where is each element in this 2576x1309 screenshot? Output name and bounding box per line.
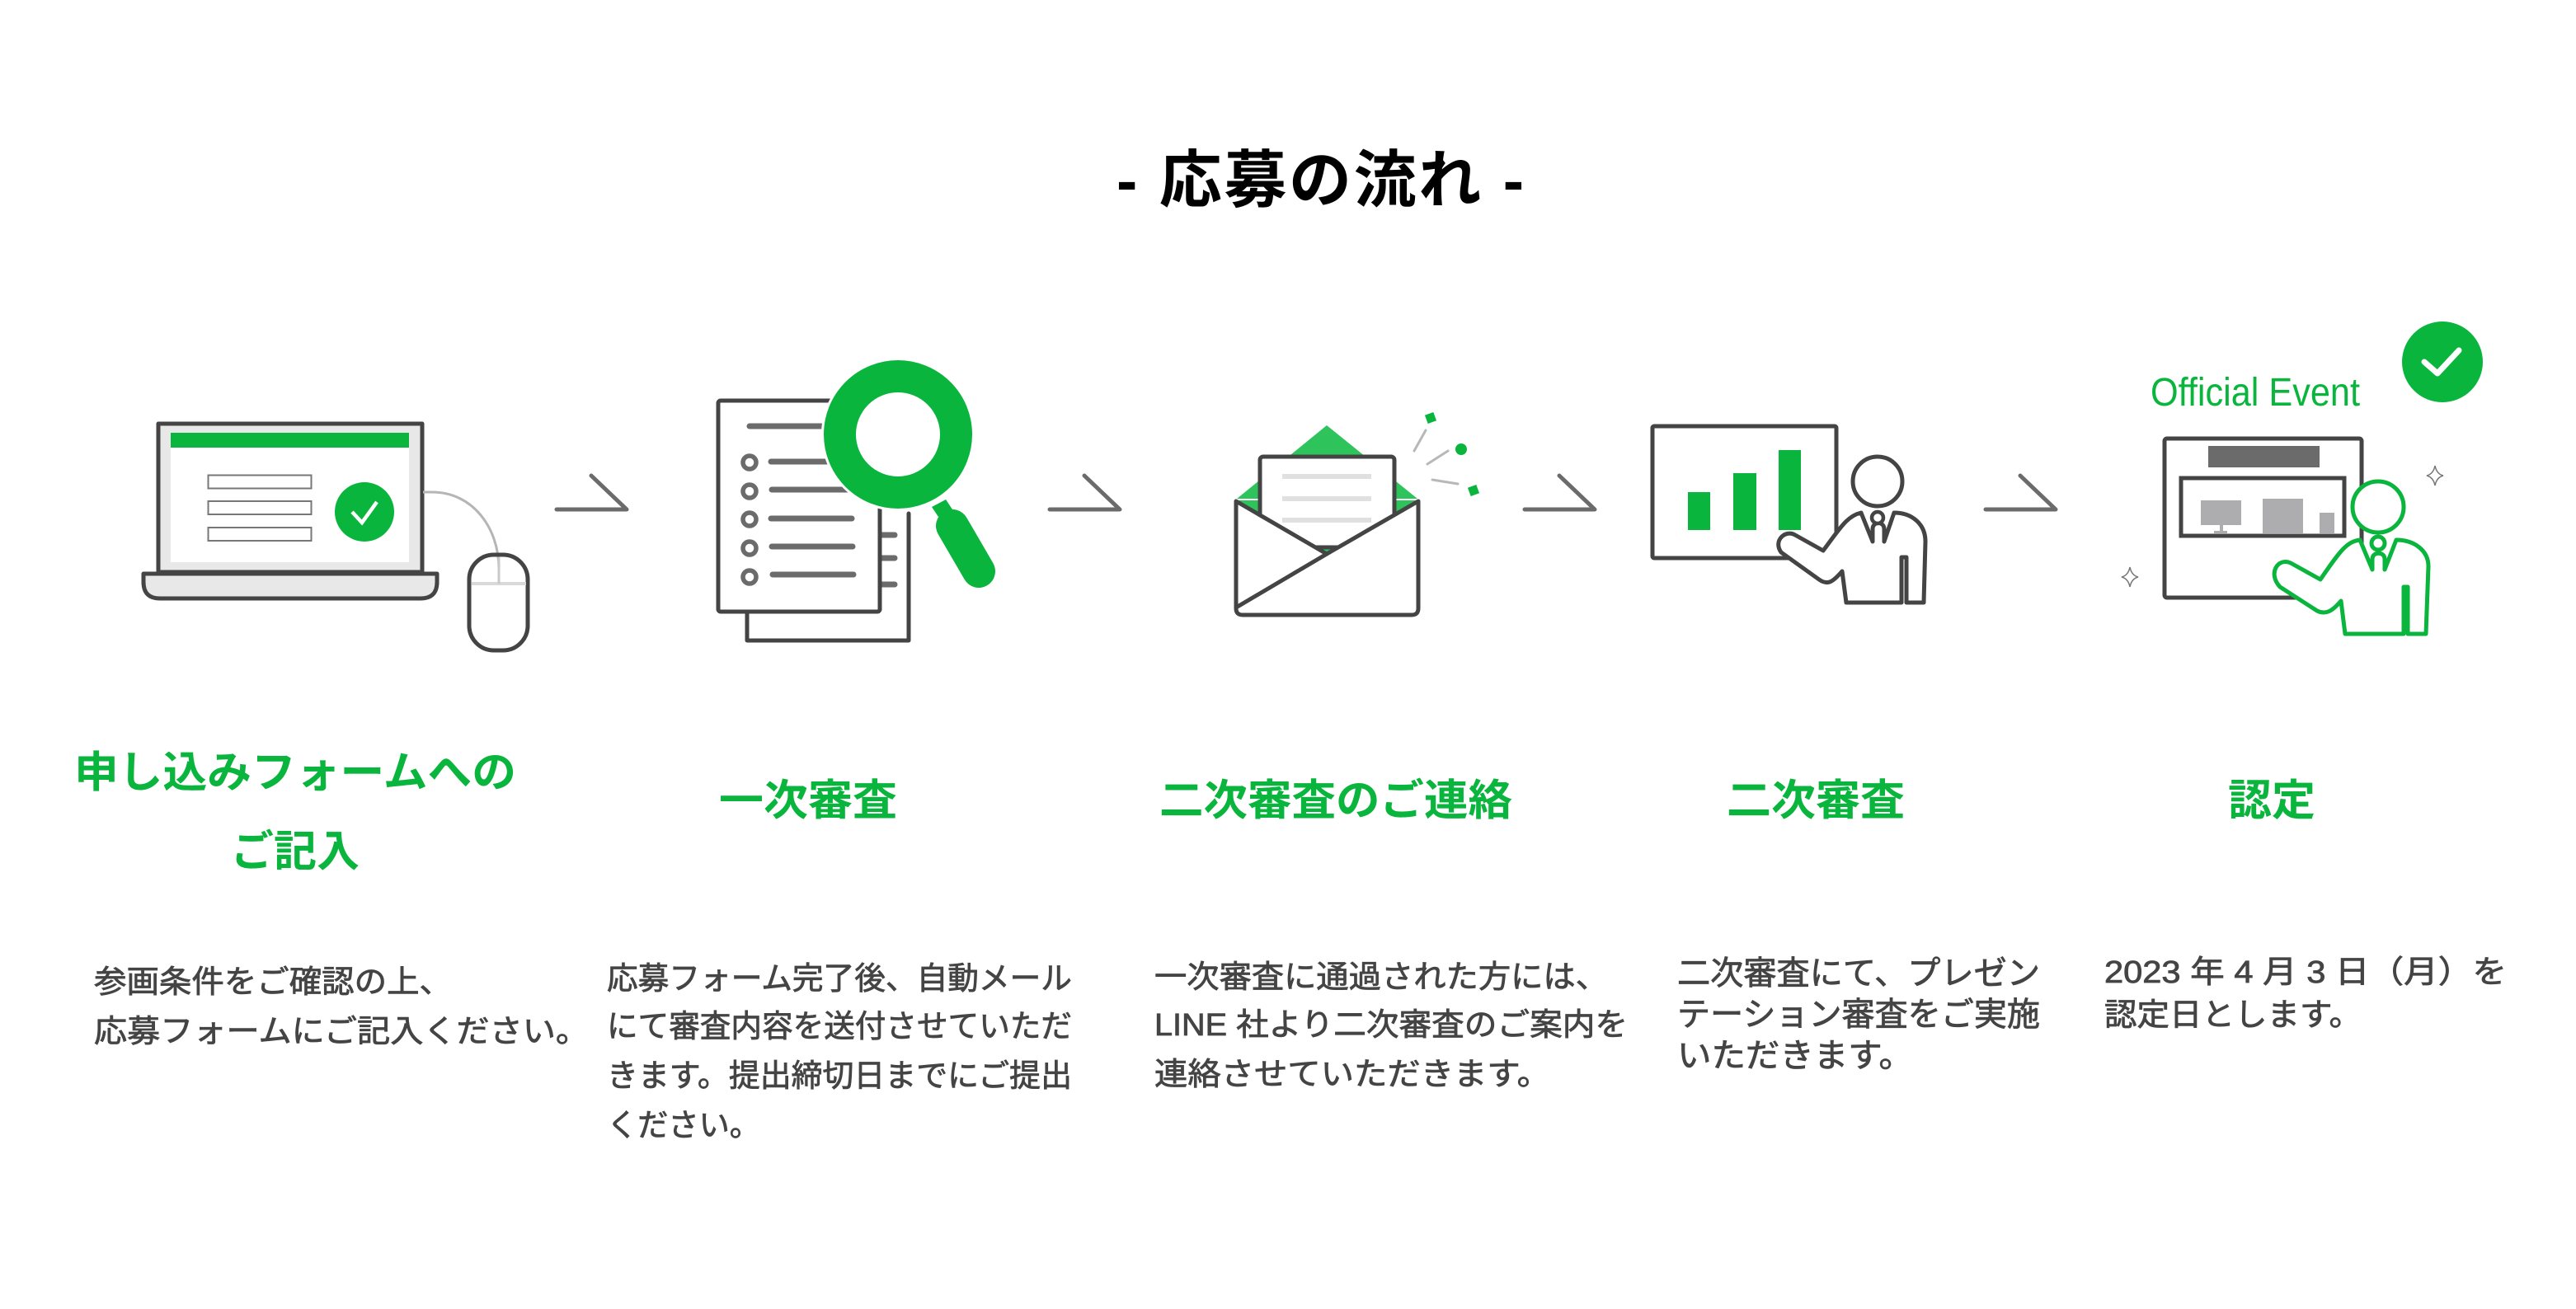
text block: step 1: 参画条件をご確認の上、: [94, 965, 452, 1000]
panel: step 1 application form: [74, 424, 589, 1049]
text block: step 2: きます。提出締切日までにご提出: [607, 1059, 1072, 1094]
heading: step 4: 二次審査: [1727, 777, 1905, 825]
text block: step 3: LINE 社より二次審査のご案内を: [1154, 1008, 1628, 1043]
panel: step 2 first screening: [607, 358, 1072, 1143]
text block: step 2: [607, 962, 1072, 1143]
icon: open envelope with confetti: [1236, 412, 1479, 615]
icon: presenter with bar chart: [1652, 426, 1925, 603]
text block: step 4: 二次審査にて、プレゼン: [1677, 955, 2040, 992]
icon: sparkle right: [2427, 466, 2443, 486]
label: Official Event: Official Event: [2151, 371, 2360, 415]
heading: step 3: 二次審査のご連絡: [1159, 777, 1512, 825]
text block: step 2: にて審査内容を送付させていただ: [607, 1010, 1072, 1044]
arrow 2: [1050, 476, 1120, 509]
text block: step 5: [2104, 955, 2507, 1033]
heading: step 5: 認定: [2228, 777, 2315, 825]
icon: laptop with form: [143, 424, 437, 598]
arrow 4: [1986, 476, 2056, 509]
heading: step 2: 一次審査: [719, 777, 897, 825]
icon: sparkle left: [2122, 567, 2138, 587]
text block: step 1: [94, 965, 589, 1049]
heading: step 1: ご記入: [231, 828, 360, 876]
text block: step 5: 認定日とします。: [2104, 998, 2362, 1033]
title: - 応募の流れ -: [1116, 146, 1524, 216]
text block: step 3: 連絡させていただきます。: [1154, 1058, 1550, 1092]
text block: step 1: 応募フォームにご記入ください。: [94, 1015, 589, 1049]
heading: step 1: 申し込みフォームへの: [74, 749, 516, 797]
icon: green check badge: [2402, 321, 2483, 402]
icon: documents with magnifier: [718, 358, 979, 640]
panel: step 4 second screening: [1652, 426, 2040, 1074]
arrow 1: [557, 476, 627, 509]
icon: mouse with cable: [423, 492, 528, 650]
text block: step 3: [1154, 960, 1628, 1092]
text block: step 4: テーション審査をご実施: [1677, 997, 2040, 1033]
panel: step 3 contact: [1154, 412, 1628, 1092]
text block: step 5: 2023 年 4 月 3 日（月）を: [2104, 955, 2507, 990]
text block: step 3: 一次審査に通過された方には、: [1154, 960, 1608, 995]
panel: step 5 certification: [2104, 321, 2507, 1033]
text block: step 2: 応募フォーム完了後、自動メール: [607, 962, 1072, 997]
text block: step 4: [1677, 955, 2040, 1074]
text block: step 4: いただきます。: [1677, 1038, 1913, 1074]
icon: official event presenter: [2122, 439, 2443, 634]
heading: step 1: [74, 749, 516, 876]
text block: step 2: ください。: [607, 1109, 760, 1143]
arrow 3: [1525, 476, 1595, 509]
